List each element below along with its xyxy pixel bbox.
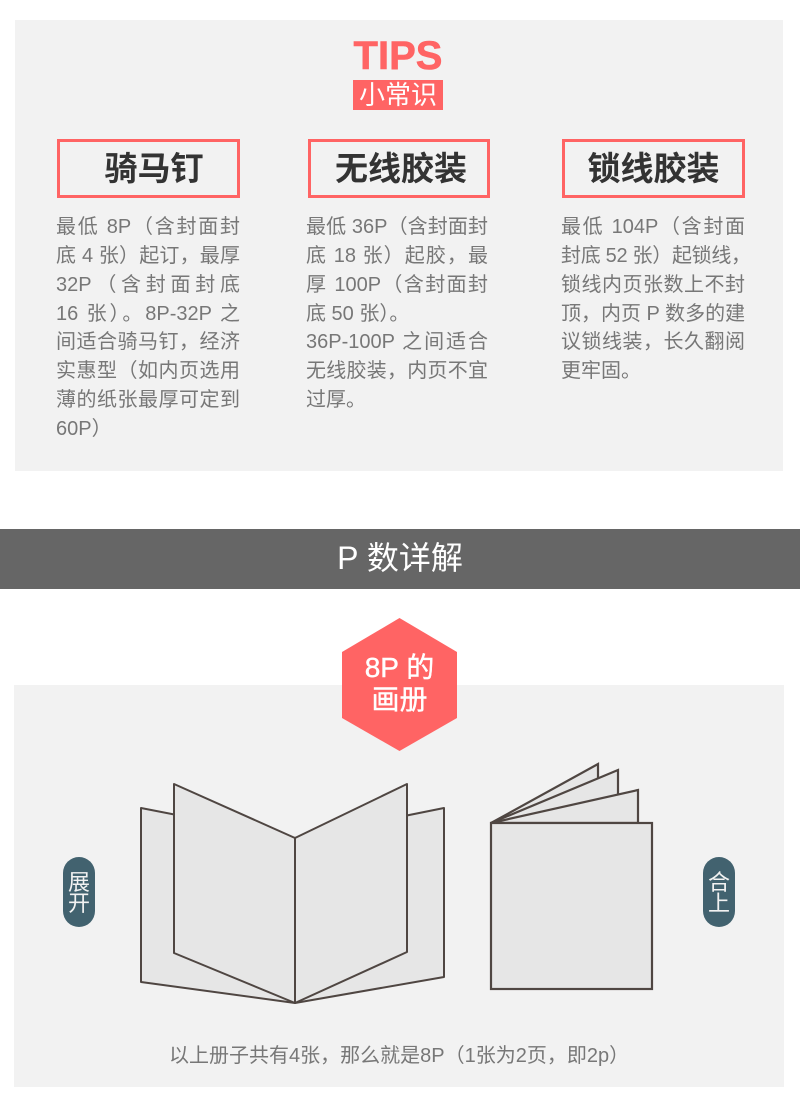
text: saddle stitch description: 32P（含封面封底 [56, 274, 240, 296]
text: thread sewn description: 顶，内页 P 数多的建 [561, 303, 745, 325]
text: thread sewn description [561, 216, 751, 382]
pill: closed [703, 857, 735, 927]
text: perfect binding description: 36P-100P 之间适合 [306, 331, 488, 353]
heading: saddle stitch [57, 139, 240, 198]
text: saddle stitch description: 最低 8P（含封面封 [56, 216, 240, 238]
icon: closed booklet [490, 762, 654, 990]
text: thread sewn description: 封底 52 张）起锁线， [561, 245, 751, 267]
text: saddle stitch description [56, 216, 240, 440]
heading: perfect binding: 无线胶装 [335, 150, 467, 187]
text: thread sewn description: 更牢固。 [561, 360, 641, 382]
text: thread sewn description: 锁线内页张数上不封 [561, 274, 745, 296]
text: perfect binding description: 无线胶装，内页不宜 [306, 360, 488, 382]
heading: perfect binding [308, 139, 490, 198]
text: saddle stitch description: 实惠型（如内页选用 [56, 360, 240, 382]
pill: unfolded: 展 [68, 870, 90, 895]
panel: 8P booklet [14, 685, 784, 1087]
icon: open booklet [140, 783, 445, 1004]
text: perfect binding description: 底 50 张）。 [306, 303, 409, 325]
pill: closed: 合 [708, 870, 730, 895]
pill: unfolded: 开 [68, 891, 90, 916]
heading: thread sewn binding: 锁线胶装 [588, 150, 720, 187]
pill: unfolded [63, 857, 95, 927]
text: saddle stitch description: 60P） [56, 418, 112, 440]
pill: closed: 上 [708, 891, 730, 916]
section banner: P 数详解 [337, 540, 463, 576]
heading: thread sewn binding [562, 139, 745, 198]
caption: 以上册子共有4张，那么就是8P（1张为2页，即2p） [169, 1045, 629, 1067]
text: thread sewn description: 议锁线装，长久翻阅 [561, 331, 745, 353]
subtitle badge: 小常识 [359, 80, 437, 110]
heading: saddle stitch: 骑马钉 [104, 150, 204, 187]
text: perfect binding description: 底 18 张）起胶，最 [306, 245, 488, 267]
text: perfect binding description [306, 216, 488, 411]
text: saddle stitch description: 16 张）。8P-32P 之 [56, 303, 240, 325]
text: saddle stitch description: 间适合骑马钉，经济 [56, 331, 240, 353]
text: perfect binding description: 最低 36P（含封面封 [306, 216, 488, 238]
hexagon badge: 8P 的 [365, 652, 434, 683]
text: thread sewn description: 最低 104P（含封面 [561, 216, 745, 238]
panel: tips [15, 20, 783, 471]
title: TIPS: TIPS [354, 34, 442, 78]
text: perfect binding description: 厚 100P（含封面封 [306, 274, 488, 296]
section banner [0, 529, 800, 589]
text: saddle stitch description: 薄的纸张最厚可定到 [56, 389, 240, 411]
text: perfect binding description: 过厚。 [306, 389, 366, 411]
hexagon badge: 画册 [371, 684, 428, 715]
text: saddle stitch description: 底 4 张）起订，最厚 [56, 245, 240, 267]
hexagon badge [342, 618, 457, 751]
